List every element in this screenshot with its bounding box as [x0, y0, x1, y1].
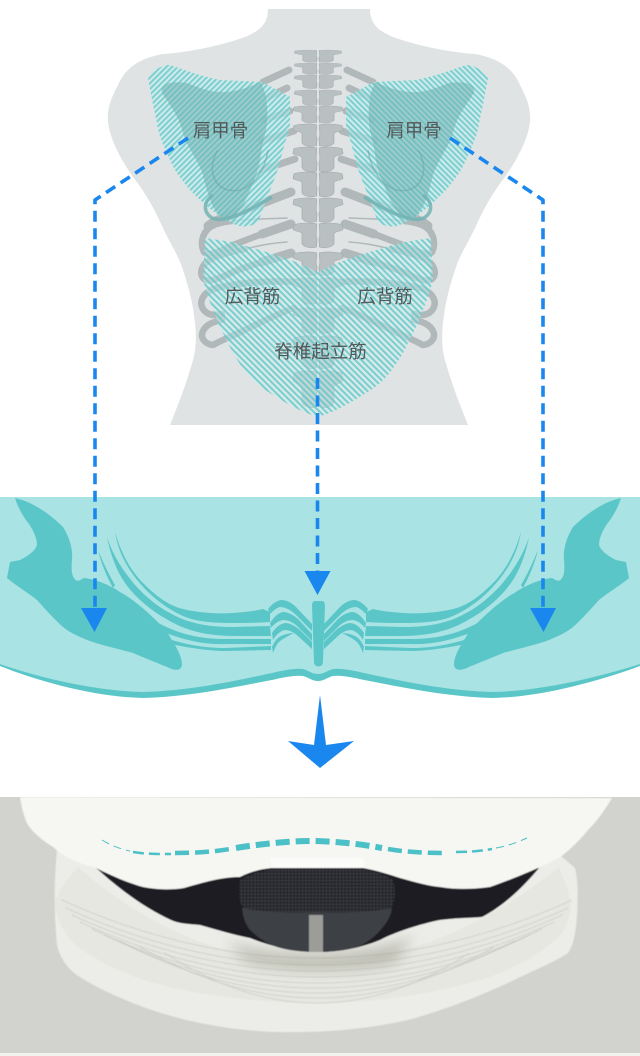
white garment [20, 797, 612, 889]
spinous process [312, 601, 325, 666]
arrow: centre dashed [304, 378, 330, 595]
lumbar seam [309, 915, 323, 952]
chair outer shell [55, 850, 578, 1032]
dark back cushion [94, 866, 539, 952]
arrow: right scapula dashed [450, 138, 556, 632]
label: right latissimus: 広背筋 [357, 286, 413, 307]
band lower edge [0, 664, 640, 698]
seat shadow [225, 935, 415, 969]
panel: cross-section band [0, 497, 640, 698]
spine vertebrae [293, 50, 343, 408]
right shoulder muscle and scapula [346, 65, 488, 226]
arrow: left scapula dashed [81, 138, 188, 632]
label: left scapula: 肩甲骨 [193, 120, 248, 141]
label: left latissimus: 広背筋 [225, 286, 280, 307]
lumbar pad lower [242, 908, 392, 952]
left scapula and rib sections [7, 498, 312, 670]
band background [0, 497, 640, 695]
right scapula and rib sections [324, 498, 629, 670]
panel: chair photo [0, 797, 640, 1053]
label: erector spinae: 脊椎起立筋 [274, 341, 367, 362]
left shoulder muscle and scapula [148, 65, 290, 226]
panel: back anatomy diagram [108, 9, 530, 425]
photo background [0, 797, 640, 1053]
ribs [201, 70, 435, 345]
lumbar pad mesh [239, 866, 395, 912]
garment centre fold [270, 858, 366, 868]
arrow: large down arrow [288, 695, 354, 768]
mesh stripes [62, 900, 572, 1003]
teal spine curve [102, 838, 527, 854]
bottom strip [0, 1053, 640, 1056]
mesh seat [55, 867, 571, 1003]
hatch: lower back muscle [203, 238, 433, 417]
label: right scapula: 肩甲骨 [386, 120, 442, 141]
body silhouette [108, 9, 530, 425]
